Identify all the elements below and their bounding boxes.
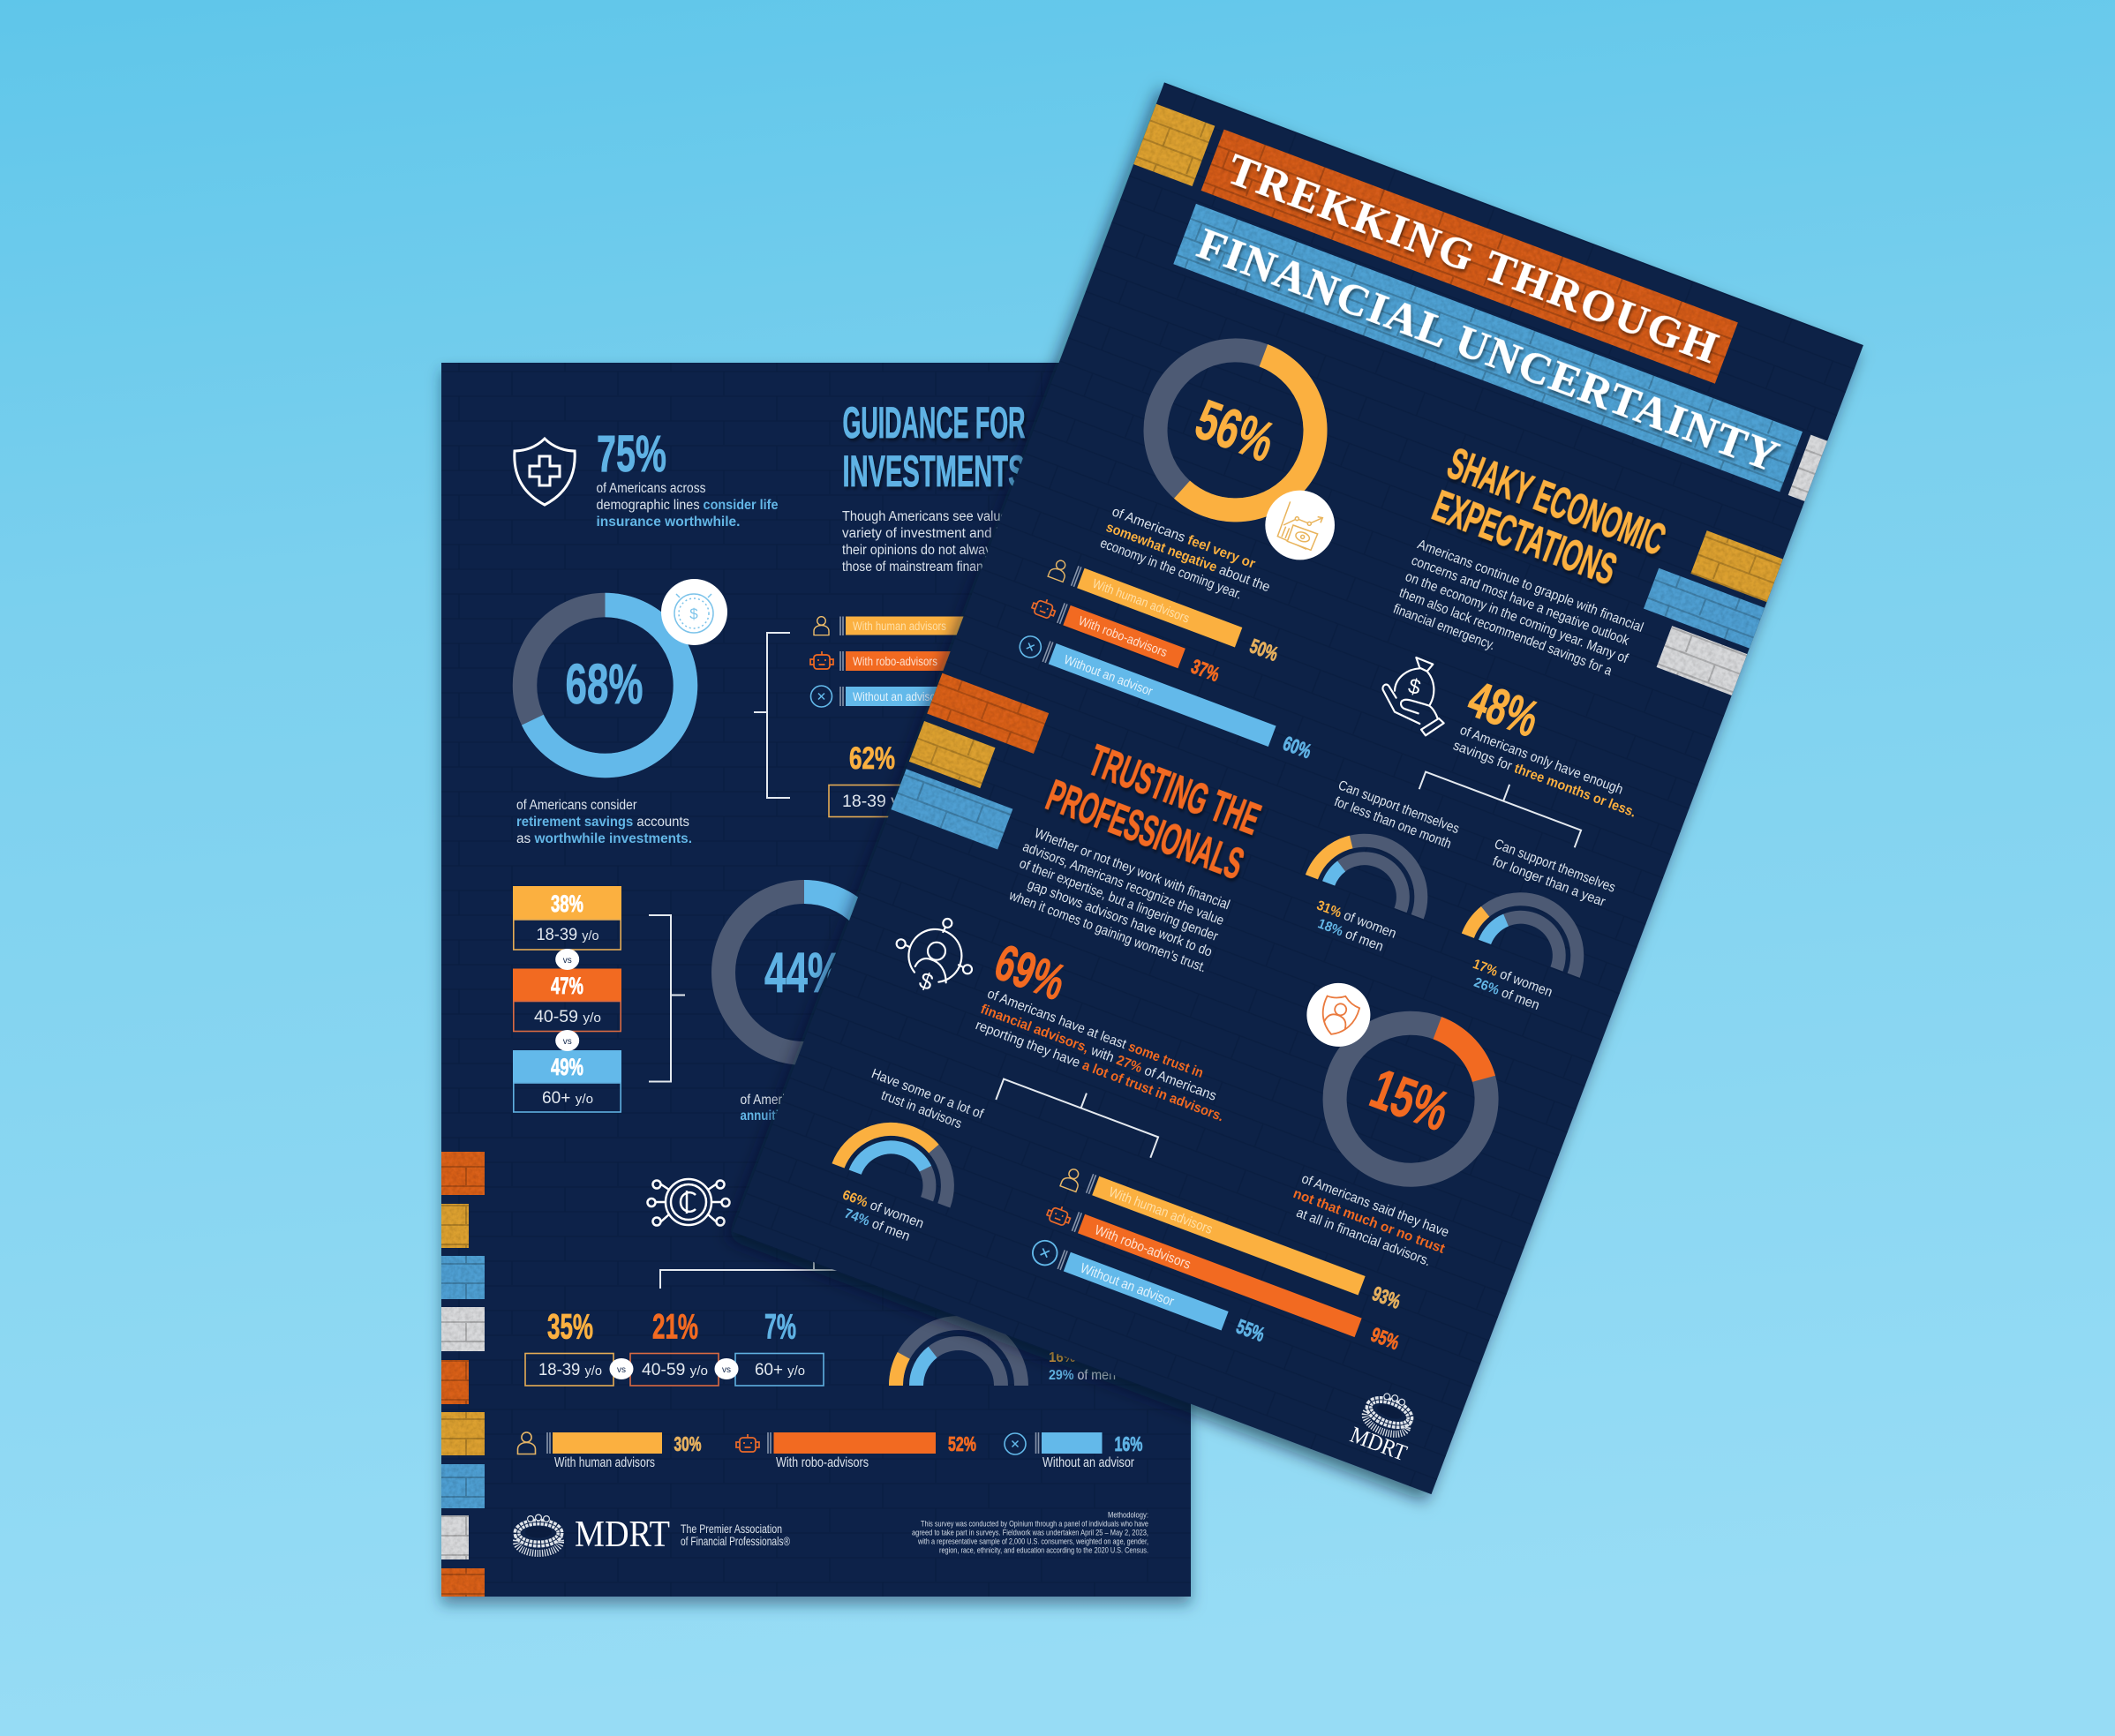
bars: advisor usage top: Without an advisor [853, 690, 939, 703]
logo: MDRT back: of Financial Professionals® [681, 1534, 790, 1548]
text: feel negative: economy in the coming year. [1098, 536, 1244, 603]
text: annuities: annuities worthwhile. [740, 1108, 860, 1124]
bars: economy expectations: 50% [1246, 634, 1282, 665]
gauge: back [896, 1323, 1021, 1386]
comparison: age boxes horizontal: 21% [652, 1308, 698, 1347]
comparison: age boxes vertical: 60+ y/o [542, 1089, 593, 1108]
donut: 56 percent: 56% [1187, 387, 1283, 474]
bars: advisor usage bottom: With human advisors [554, 1455, 655, 1470]
gauge: longer than a year: 17% of women [1471, 957, 1554, 1000]
text: methodology: This survey was conducted by Opinium through a panel of individuals who have [921, 1520, 1148, 1529]
text: gauge labels back: 16% of women [1049, 1350, 1137, 1365]
gauge: less than one month: 31% of women [1314, 898, 1398, 942]
comparison: age boxes vertical: 47% [551, 973, 583, 999]
text: guidance intro: variety of investment and insurance [842, 526, 1054, 541]
stat: 69 percent [971, 934, 1257, 1124]
comparison: age boxes vertical: 49% [551, 1054, 583, 1080]
gauge: longer than a year: for longer than a year [1491, 853, 1607, 910]
bars: advisor usage bottom: 30% [674, 1432, 701, 1455]
text: shaky intro: them also lack recommended savings for a [1397, 585, 1614, 679]
gauge: less than one month: 18% of men [1315, 916, 1385, 955]
title banner: TREKKING THROUGH [1221, 143, 1725, 372]
text: shaky intro: financial emergency. [1391, 601, 1497, 653]
donut: 15 percent: 15% [1362, 1056, 1457, 1143]
icon: money bag in hand [1382, 658, 1444, 735]
text: retirement savings [516, 798, 692, 846]
icon: shield with cross [515, 439, 575, 505]
gauge: trust [820, 1066, 986, 1253]
comparison: age boxes vertical: vs [563, 1037, 572, 1047]
heading: trusting the professionals: TRUSTING THE [1082, 735, 1267, 845]
icon: trust badge [1298, 974, 1380, 1056]
comparison: age boxes horizontal [525, 1308, 824, 1386]
icon: crypto coin [648, 1179, 729, 1225]
text: retirement savings: retirement savings accounts [516, 815, 689, 830]
donut: 44 percent [724, 891, 884, 1054]
bars: advisor usage top: With robo-advisors [853, 655, 937, 668]
comparison: age boxes horizontal: 18-39 y/o [538, 1361, 602, 1379]
stat: 75 percent: insurance worthwhile. [597, 515, 740, 530]
text: trusting intro: gap shows advisors have work to do [1026, 877, 1214, 960]
text: trusting intro: of their expertise, but a lingering gender [1017, 856, 1220, 944]
text: feel negative: somewhat negative about the [1104, 520, 1272, 595]
bars: economy expectations: 60% [1280, 732, 1314, 763]
title banner: FINANCIAL UNCERTAINTY [1192, 218, 1786, 481]
comparison: age boxes horizontal: 7% [764, 1308, 796, 1347]
icon: person network: $ [915, 966, 937, 996]
donut: 44 percent: 44% [764, 941, 842, 1004]
donut: 68 percent: 68% [565, 652, 643, 716]
gauge: less than one month: for less than one month [1332, 794, 1453, 852]
left brick column [441, 1152, 485, 1597]
comparison: age boxes horizontal: vs [617, 1365, 626, 1375]
sheet base [733, 82, 1863, 1494]
bars: advisor usage top [810, 616, 1058, 707]
text: guidance intro: Though Americans see value in a [842, 509, 1032, 524]
heading: guidance for investments [842, 398, 1026, 496]
text: shaky intro: concerns and most have a negative outlook [1409, 553, 1631, 649]
donut: 15 percent [1313, 1001, 1509, 1197]
gauge: longer than a year [1444, 837, 1617, 1024]
text: methodology: region, race, ethnicity, and education according to the 2020 U.S. Census. [939, 1546, 1148, 1555]
heading: trusting the professionals: PROFESSIONALS [1040, 770, 1250, 889]
text: shaky intro: on the economy in the coming year. Many of [1404, 569, 1630, 666]
bars: trust in advisors: 93% [1369, 1281, 1404, 1313]
comparison: age boxes horizontal: 40-59 y/o [642, 1361, 708, 1379]
bracket: trust [996, 1064, 1163, 1158]
text: methodology: agreed to take part in surveys. Fieldwork was undertaken April 25 – May 2, 2023, [912, 1529, 1148, 1537]
text: not that much: of Americans said they have [1299, 1171, 1451, 1240]
bars: economy expectations: With human advisors [1090, 577, 1191, 627]
bars: advisor usage bottom [517, 1432, 1142, 1470]
gauge: trust: Have some or a lot of [869, 1066, 986, 1122]
comparison: age boxes horizontal: vs [722, 1365, 731, 1375]
panel: front sheet [733, 82, 1863, 1494]
bars: trust in advisors: Without an advisor [1078, 1261, 1176, 1310]
bracket: age boxes [649, 915, 685, 1082]
text: annuities [740, 1093, 860, 1124]
bars: trust in advisors: 55% [1233, 1314, 1268, 1346]
gauge: less than one month [1288, 778, 1462, 965]
gauge: trust: trust in advisors [879, 1088, 964, 1131]
bars: trust in advisors: With human advisors [1107, 1184, 1215, 1237]
stat: 69 percent: financial advisors, with 27% of Americans [978, 1002, 1218, 1104]
comparison: age boxes vertical: 40-59 y/o [534, 1008, 601, 1026]
text: trusting intro: advisors, Americans recognize the value [1020, 839, 1226, 928]
text: guidance intro: their opinions do not always align with [842, 543, 1054, 558]
stat: 69 percent: 69% [988, 934, 1073, 1011]
heading: guidance for investments: INVESTMENTS [842, 447, 1026, 496]
bars: advisor usage bottom: Without an advisor [1042, 1455, 1134, 1470]
comparison: age boxes vertical [513, 886, 621, 1112]
text: guidance intro: those of mainstream financial advisors. [842, 560, 1054, 575]
stat: 48 percent: 48% [1461, 670, 1547, 748]
heading: guidance for investments: GUIDANCE FOR [842, 398, 1026, 447]
text: trusting intro: Whether or not they work with financial [1032, 826, 1231, 913]
stat: 75 percent: 75% [597, 425, 666, 483]
icon: money bag in hand: $ [1406, 674, 1423, 700]
stat: 48 percent: savings for three months or less. [1451, 738, 1638, 821]
text: guidance intro [842, 509, 1054, 575]
text: methodology [912, 1511, 1148, 1555]
stat: 75 percent: of Americans across [597, 481, 706, 496]
text: retirement savings: of Americans consider [516, 798, 637, 813]
text: methodology: with a representative sample of 2,000 U.S. consumers, weighted on age, gender, [917, 1537, 1148, 1546]
text: feel negative: of Americans feel very or [1110, 504, 1257, 572]
text: methodology: Methodology: [1108, 1511, 1148, 1520]
text: trusting intro [1003, 823, 1231, 975]
icon: chart and banknote [1265, 491, 1335, 560]
stat: 62 percent: 18-39 y/o [842, 792, 914, 811]
stat: 75 percent: demographic lines consider life [597, 498, 779, 513]
logo: MDRT back [516, 1514, 790, 1555]
icon: stopwatch dollar: $ [689, 605, 698, 622]
gauge: less than one month: Can support themselves [1336, 778, 1462, 837]
text: feel negative [1098, 504, 1278, 611]
heading: shaky economic expectations: SHAKY ECONOMIC [1441, 439, 1672, 565]
bars: economy expectations: Without an advisor [1062, 653, 1155, 699]
bars: trust in advisors: With robo-advisors [1093, 1222, 1193, 1273]
brick accents [891, 104, 1855, 1072]
comparison: age boxes vertical: vs [563, 956, 572, 966]
comparison: age boxes horizontal: 35% [547, 1308, 593, 1347]
text: gauge labels back: 29% of men [1049, 1368, 1116, 1383]
bars: advisor usage bottom: 16% [1114, 1432, 1142, 1455]
donut: 68 percent [524, 605, 685, 766]
text: shaky intro [1391, 537, 1645, 700]
heading: trusting the professionals [1040, 725, 1267, 889]
bracket: advisors [754, 633, 790, 798]
gauge: trust: 66% of women [840, 1187, 926, 1231]
logo: MDRT back: The Premier Association [681, 1522, 782, 1536]
bars: economy expectations: With robo-advisors [1076, 614, 1169, 660]
text: retirement savings: as worthwhile investments. [516, 831, 692, 846]
comparison: age boxes vertical: 18-39 y/o [537, 926, 598, 944]
gauge: longer than a year: 26% of men [1471, 975, 1541, 1013]
stat: 48 percent: of Americans only have enough [1457, 723, 1625, 798]
comparison: age boxes horizontal: 60+ y/o [755, 1361, 805, 1379]
comparison: age boxes vertical: 38% [551, 891, 583, 917]
bars: economy expectations [1015, 556, 1344, 763]
text: not that much: not that much or no trust [1291, 1186, 1447, 1257]
text: annuities: of Americans consider [740, 1093, 860, 1108]
stat: 48 percent [1450, 670, 1664, 821]
bracket: crypto [660, 1257, 989, 1289]
gauge: longer than a year: Can support themselves [1493, 837, 1617, 896]
stat: 62 percent: 62% [849, 741, 895, 776]
bars: advisor usage top: With human advisors [853, 620, 946, 633]
stat: 69 percent: of Americans have at least some trust in [985, 987, 1205, 1081]
sheet base [441, 363, 1191, 1597]
gauge: trust: 74% of men [842, 1206, 912, 1244]
bars: economy expectations: 37% [1188, 655, 1223, 686]
stat: 62 percent [829, 741, 919, 817]
text: not that much: at all in financial advisors. [1294, 1206, 1433, 1269]
bars: trust in advisors [1029, 1163, 1417, 1392]
title banner [1173, 130, 1831, 492]
heading: shaky economic expectations: EXPECTATIONS [1426, 481, 1623, 594]
logo: MDRT back: MDRT [575, 1514, 670, 1555]
heading: shaky economic expectations [1426, 439, 1672, 606]
stat: 69 percent: reporting they have a lot of trust in advisors. [974, 1018, 1226, 1124]
bracket: savings [1419, 755, 1587, 847]
icon: person network [897, 919, 972, 996]
stat: 75 percent [597, 425, 779, 530]
bars: advisor usage bottom: With robo-advisors [776, 1455, 869, 1470]
logo: MDRT front [1347, 1386, 1424, 1466]
text: not that much [1285, 1170, 1453, 1273]
donut: 56 percent [1133, 327, 1338, 533]
text: trusting intro: when it comes to gaining women’s trust. [1006, 888, 1208, 975]
text: shaky intro: Americans continue to grapple with financial [1415, 537, 1645, 635]
bars: advisor usage bottom: 52% [948, 1432, 976, 1455]
bars: trust in advisors: 95% [1368, 1323, 1403, 1354]
logo: MDRT front: MDRT [1347, 1422, 1411, 1466]
text: gauge labels back [1049, 1350, 1137, 1383]
icon: stopwatch dollar [661, 579, 727, 645]
panel: back sheet [441, 363, 1191, 1597]
